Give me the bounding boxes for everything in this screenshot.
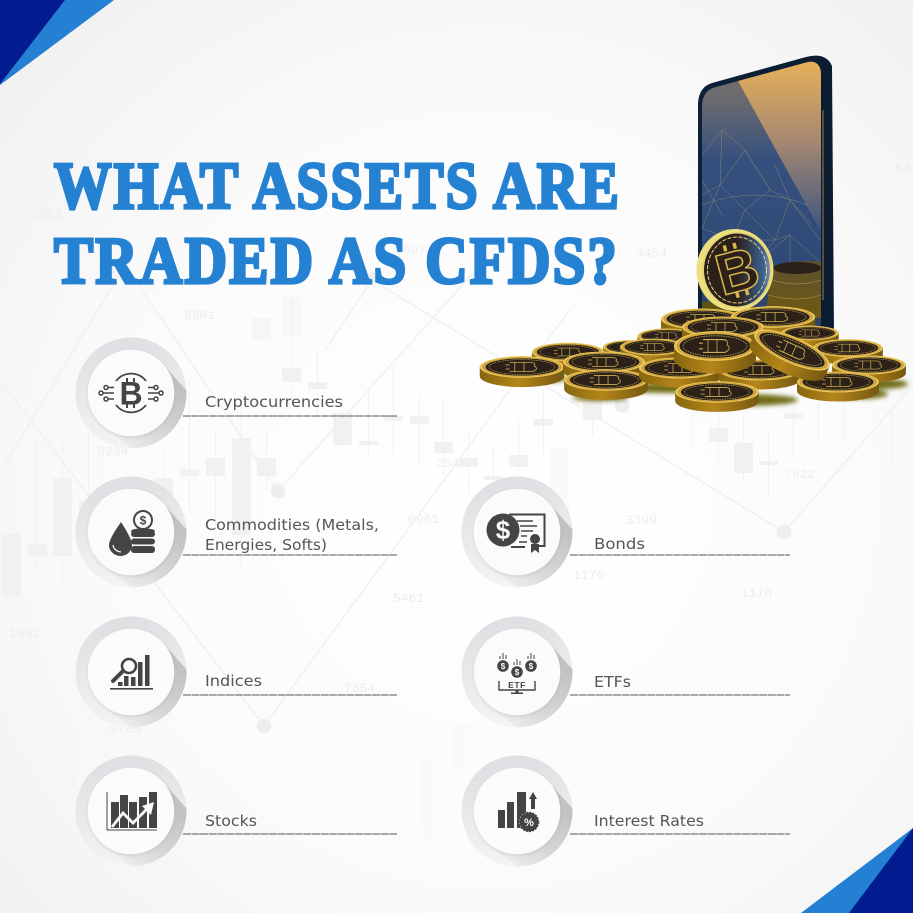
icon ring bbox=[462, 476, 602, 617]
icon: bars with rising arrow bbox=[107, 792, 157, 830]
faint chart numbers: 54 bbox=[895, 161, 911, 176]
icon: oil drop and coins bbox=[109, 511, 155, 556]
divider bbox=[570, 694, 790, 696]
title bbox=[54, 149, 621, 298]
icon ring bbox=[76, 338, 216, 478]
screen glare bbox=[738, 62, 821, 232]
icon ring bbox=[462, 616, 602, 757]
candlesticks bbox=[2, 297, 905, 842]
standing bitcoin bbox=[696, 229, 774, 311]
icon: ETF monitor with coins bbox=[497, 653, 537, 694]
label: Indices bbox=[205, 672, 262, 690]
faint chart numbers: 1176 bbox=[741, 586, 772, 601]
divider bbox=[183, 554, 397, 556]
phone screen bbox=[702, 62, 821, 335]
corner accent: bottom right bbox=[801, 828, 913, 913]
divider bbox=[183, 694, 397, 696]
item: Interest Rates bbox=[462, 756, 790, 896]
icon: ETF monitor with coins: ETF bbox=[508, 680, 526, 690]
item: Indices bbox=[76, 616, 397, 757]
faint chart numbers: 1002 bbox=[31, 207, 62, 222]
coin stack on screen bbox=[702, 261, 821, 318]
faint chart numbers bbox=[9, 161, 911, 737]
item: Bonds bbox=[462, 476, 790, 617]
background trading chart bbox=[0, 161, 913, 842]
phone body bbox=[698, 56, 834, 335]
icon: ETF monitor with coins: $ bbox=[501, 662, 506, 671]
faint chart numbers: 8901 bbox=[184, 308, 215, 323]
faint chart numbers: 1176 bbox=[573, 568, 604, 583]
icon: ETF monitor with coins: $ bbox=[529, 662, 534, 671]
divider bbox=[570, 833, 790, 835]
icon: bitcoin network: B bbox=[119, 376, 143, 412]
label: Interest Rates bbox=[594, 812, 704, 830]
item: Stocks bbox=[76, 756, 397, 896]
title: WHAT ASSETS ARE bbox=[54, 149, 621, 223]
item: Cryptocurrencies bbox=[76, 338, 397, 478]
label: Energies, Softs) bbox=[205, 536, 327, 554]
corner accent: top left bbox=[0, 0, 114, 85]
faint chart numbers: 8765 bbox=[110, 722, 141, 737]
label: ETFs bbox=[594, 673, 631, 691]
faint chart numbers: 5461 bbox=[393, 591, 424, 606]
faint chart numbers: 3454 bbox=[636, 246, 667, 261]
icon ring bbox=[76, 756, 216, 896]
mesh pattern on screen bbox=[702, 130, 820, 318]
divider bbox=[570, 554, 790, 556]
title: TRADED AS CFDS? bbox=[54, 224, 619, 298]
label: Bonds bbox=[594, 535, 645, 553]
trend line bbox=[0, 243, 913, 726]
faint chart numbers: 3399 bbox=[626, 513, 657, 528]
icon ring bbox=[76, 616, 216, 757]
icon: bond certificate: $ bbox=[496, 515, 511, 545]
icon: rising bars with percent badge bbox=[498, 792, 539, 832]
front coins bbox=[480, 321, 879, 412]
phone illustration bbox=[698, 56, 834, 335]
standing bitcoin: B bbox=[709, 235, 766, 308]
divider bbox=[183, 415, 397, 417]
faint chart numbers: 7822 bbox=[784, 467, 815, 482]
icon: rising bars with percent badge: % bbox=[524, 817, 534, 829]
icon: bond certificate bbox=[486, 514, 544, 553]
icon ring bbox=[462, 756, 602, 896]
faint chart numbers: 0234 bbox=[97, 444, 128, 459]
icon: ETF monitor with coins: $ bbox=[515, 668, 520, 677]
trend nodes bbox=[105, 265, 792, 734]
icon: oil drop and coins: $ bbox=[140, 514, 147, 528]
bitcoin pile bbox=[480, 306, 908, 412]
label: Commodities (Metals, bbox=[205, 516, 379, 534]
item: Commodities bbox=[76, 476, 397, 617]
faint chart numbers: 7854 bbox=[344, 681, 375, 696]
item: ETFs bbox=[462, 616, 790, 757]
pile shadow bbox=[520, 376, 908, 406]
label: Stocks bbox=[205, 812, 257, 830]
faint chart numbers: 2548 bbox=[436, 456, 467, 471]
faint chart numbers: 1007 bbox=[395, 243, 426, 258]
icon ring bbox=[76, 476, 216, 617]
divider bbox=[183, 833, 397, 835]
gold edge of phone bbox=[822, 110, 824, 300]
faint chart numbers: 0961 bbox=[408, 512, 439, 527]
back coins bbox=[532, 306, 906, 383]
icon: magnifier over bars bbox=[110, 655, 153, 690]
label: Cryptocurrencies bbox=[205, 393, 343, 411]
icon: bitcoin network bbox=[99, 374, 163, 412]
faint chart numbers: 1932 bbox=[9, 626, 40, 641]
